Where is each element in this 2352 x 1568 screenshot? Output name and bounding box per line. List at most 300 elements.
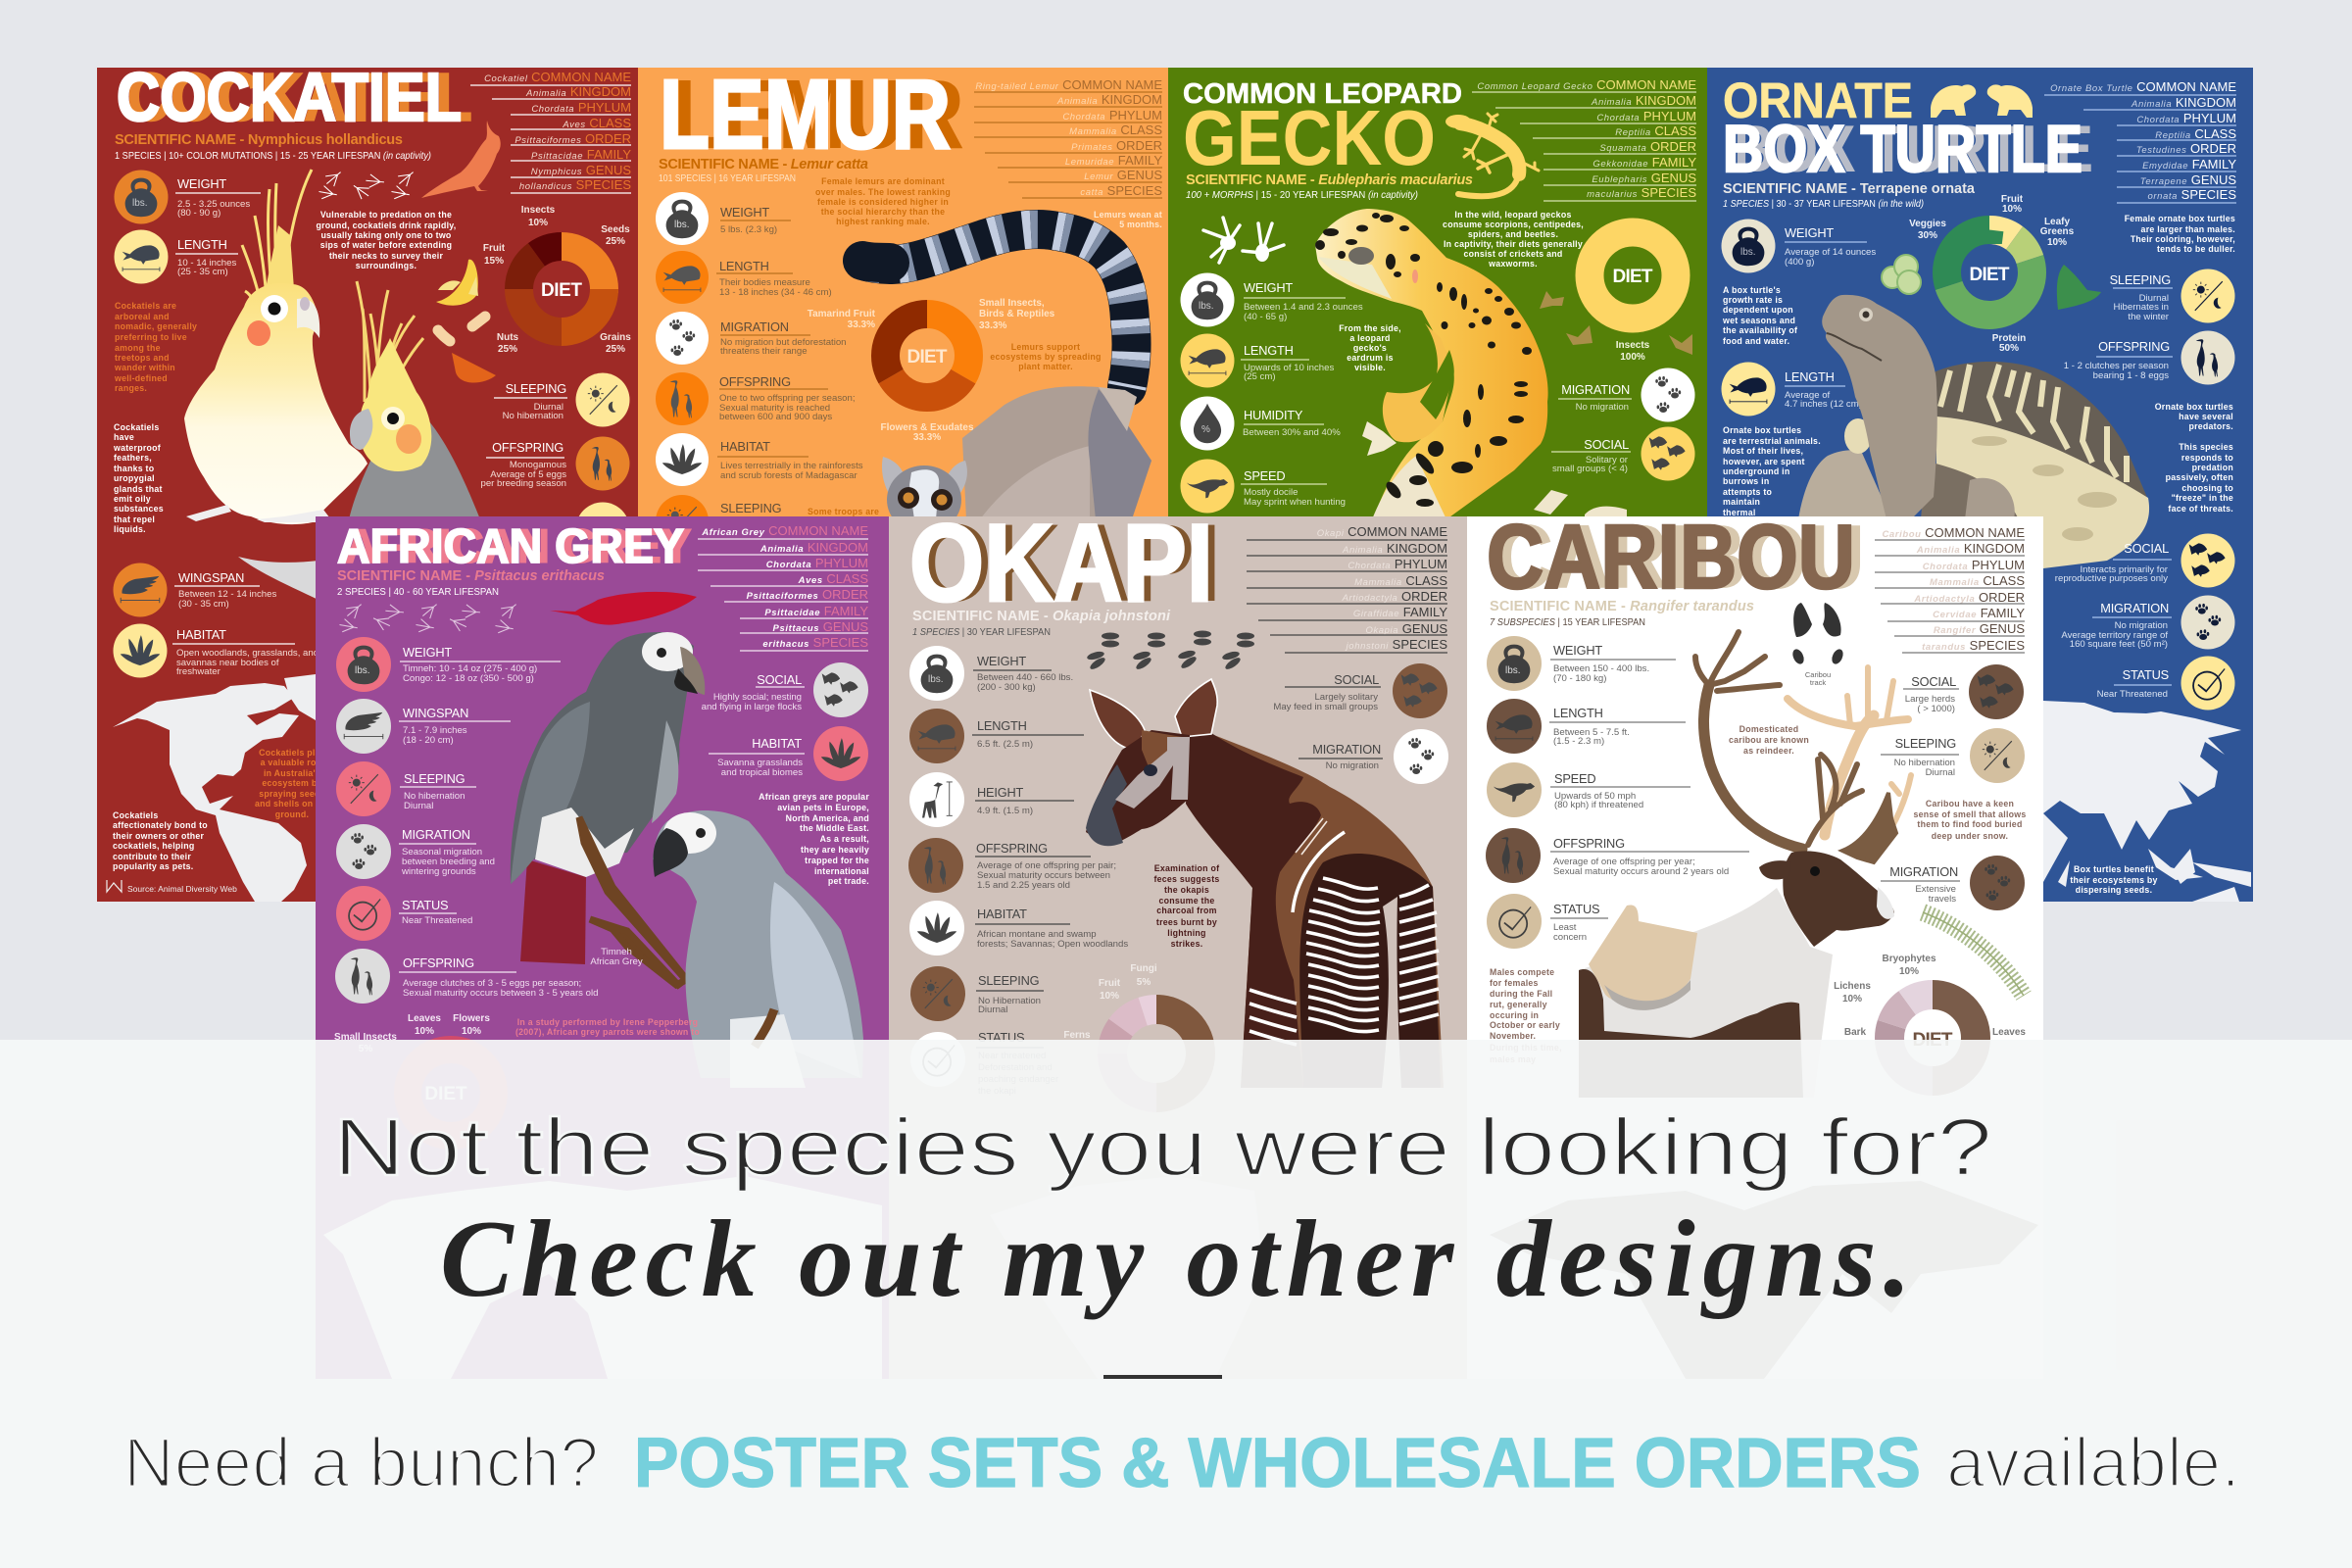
panel: leopard gecko poster [1168,68,1707,902]
note: charcoal: Examination of [1154,863,1219,873]
stat: length [114,229,238,284]
chart: diet donut: Veggies [1909,219,1946,229]
note: pet trade: pet trade. [828,876,869,886]
title: caribou: CARIBOU [1496,506,1865,608]
stat: sleeping [657,495,781,516]
stat: length: LENGTH [719,259,769,273]
stat: length: 4.7 inches (12 cm) [1785,399,1862,410]
stat: status [336,886,472,941]
note: charcoal: lightning [1167,928,1206,938]
stat: social: Solitary or [1586,455,1629,466]
stat: weight: lbs. [1199,301,1214,312]
taxonomy list: Animalia KINGDOM [760,540,868,555]
source credit: Source: Animal Diversity Web [127,884,237,894]
title: cockatiel: COCKATIEL [127,59,472,135]
chart: diet donut: 5% [1137,977,1151,988]
note: pet trade: they are heavily [801,845,869,855]
stat: sleeping: No hibernation [1894,758,1955,768]
stat: migration [1881,856,2025,910]
stat: speed: SPEED [1244,468,1285,483]
note: waterproof feathers: have [114,432,134,442]
stat: migration: threatens their range [720,346,808,357]
stat: humidity: HUMIDITY [1244,408,1303,422]
illustration: congo parrot [653,810,863,1088]
taxonomy list: Nymphicus GENUS [531,163,631,177]
note: charcoal: trees burnt by [1156,917,1217,927]
note: female dominance: female is considered higher in [817,197,949,207]
note: growth rate: the availability of [1723,325,1797,335]
chart: diet donut: Insects [521,205,556,216]
title: common leopard gecko: GECKO [1183,94,1436,181]
note: seeds ecosystem: and shells on the [255,799,329,808]
stat: status: STATUS [978,1030,1024,1045]
note: predators: This species [2179,442,2233,452]
illustration: caribou track: Caribou [1805,670,1831,679]
note: smell: deep under snow. [1932,831,2008,841]
note: waterproof feathers: emit oily [114,494,151,504]
note: waterproof feathers: glands that [114,484,163,494]
title: african grey: AFRICAN GREY [345,520,692,573]
note: charcoal: feces suggests [1153,874,1220,884]
species summary: 1 SPECIES | 10+ COLOR MUTATIONS | 15 - 25 YEAR LIFESPAN (in captivity) [115,150,431,162]
illustration: small cockatiel [349,281,480,519]
illustration: okapi [1086,679,1444,1088]
note: arboreal: wander within [114,363,175,372]
stat: weight: lbs. [928,674,944,685]
stat: sleeping [910,966,1044,1021]
stat: habitat: African montane and swamp [977,929,1097,940]
note: charcoal: strikes. [1171,939,1202,949]
taxonomy list: Emydidae FAMILY [2142,157,2236,172]
stat: social [702,662,868,717]
taxonomy list [698,523,868,651]
stat: offspring: One to two offspring per season; [719,393,855,404]
stat: migration: No migration [1326,760,1379,771]
title: ornate box turtle: BOX TURTLE [1723,112,2082,186]
taxonomy list [1472,77,1696,201]
taxonomy list: Lemuridae FAMILY [1065,153,1162,168]
illustration: tan antler [1788,667,1911,843]
stat: social: SOCIAL [1911,674,1956,689]
stat: sleeping: SLEEPING [2110,272,2171,287]
illustration: fern [1923,912,2024,996]
stat: offspring: Monogamous [510,460,566,470]
note: ecosystems: ecosystems by spreading [990,352,1102,362]
chart: diet donut [808,298,1055,443]
note: pets: their owners or other [113,831,205,841]
scientific name: SCIENTIFIC NAME - Psittacus erithacus [337,568,605,584]
note: terrestrial: thermal [1723,508,1756,517]
stat: social [2055,533,2234,588]
stat: status [1487,894,1608,949]
headline: check out my other designs: Check out my other designs. [440,1199,1911,1320]
title: common leopard gecko: COMMON LEOPARD [1183,78,1462,110]
stat: speed: (80 kph) if threatened [1554,800,1643,810]
stat: wingspan: Between 12 - 14 inches [178,589,276,600]
taxonomy list: Reptilia CLASS [1615,123,1696,138]
stat: weight: WEIGHT [177,176,226,191]
chart: diet donut: Tamarind Fruit [808,309,876,319]
taxonomy list: Psittacus GENUS [773,619,868,634]
stat: length [909,709,1084,763]
stat: length: Upwards of 10 inches [1244,363,1334,373]
note: fall rut: occuring in [1490,1010,1539,1020]
species summary: 100 + MORPHS | 15 - 20 YEAR LIFESPAN (in captivity) [1186,189,1418,201]
note: terrestrial: maintain [1723,497,1760,507]
stat: offspring: bearing 1 - 8 eggs [2093,370,2169,381]
note: females: Their coloring, however, [2131,234,2235,244]
note: terrestrial: however, are spent [1723,457,1805,466]
stat: weight: WEIGHT [977,654,1026,668]
note: charcoal: charcoal from [1156,906,1217,915]
note: arboreal: treetops and [115,353,170,363]
illustration: leafy greens [2057,265,2101,310]
note: fall rut: During this time, [1490,1043,1562,1053]
note: predators: face of threats. [2168,504,2233,514]
note: seeds ecosystem: in Australia's [264,768,320,778]
chart: diet donut: 100% [1620,352,1645,363]
stat: migration: MIGRATION [402,827,470,842]
taxonomy list: Rangifer GENUS [1934,621,2025,636]
chart: diet donut: Fruit [2001,194,2024,205]
stat: weight: Congo: 12 - 18 oz (350 - 500 g) [403,673,534,684]
stat: sleeping: SLEEPING [404,771,465,786]
stat: sleeping: No hibernation [503,411,564,421]
species summary: 1 SPECIES | 30 YEAR LIFESPAN [912,626,1051,638]
note: females: Female ornate box turtles [2125,214,2235,223]
stat: length [656,251,832,304]
chart: diet donut: Leaves [1992,1027,2026,1038]
stat: migration: MIGRATION [720,319,789,334]
stat: weight: WEIGHT [403,645,452,660]
note: wild diet: In the wild, leopard geckos [1454,210,1572,220]
illustration: bird tracks [338,599,520,635]
stat: height [909,772,1074,827]
stat: weight: lbs. [1505,665,1521,676]
note: arboreal: Cockatiels are [115,301,176,311]
taxonomy list: Eublepharis GENUS [1592,171,1696,185]
stat: length [1721,363,1862,416]
note: waterproof feathers: feathers, [114,453,152,463]
stat: wingspan: WINGSPAN [178,570,244,585]
stat: sleeping [494,372,629,427]
stat: length: LENGTH [1785,369,1835,384]
stat: offspring: 1.5 and 2.25 years old [977,880,1070,891]
note: pets: Cockatiels [113,810,159,820]
stat: offspring [481,437,629,490]
stat: social: SOCIAL [1334,672,1379,687]
stat: habitat [909,901,1128,956]
stat: length [1180,333,1334,388]
faded: world map [1490,1181,2038,1379]
chart: diet donut [1909,194,2075,354]
diet labels: 5% [359,1044,372,1054]
taxonomy list: Animalia KINGDOM [2131,95,2236,110]
chart: diet donut: DIET [1613,267,1653,287]
stat: weight: Timneh: 10 - 14 oz (275 - 400 g) [403,663,537,674]
taxonomy list [2044,79,2236,203]
title: lemur: LEMUR [660,60,951,170]
note: pet trade: avian pets in Europe, [777,803,869,812]
taxonomy list: Chordata PHYLUM [531,100,631,115]
stat: status: poaching endanger [978,1074,1059,1085]
note: seed dispersal: Box turtles benefit [2074,864,2154,874]
chart: diet donut: 10% [1842,994,1862,1004]
stat: weight: WEIGHT [1785,225,1834,240]
stat: wingspan: (30 - 35 cm) [178,599,229,610]
stat: sleeping: Diurnal [2139,293,2169,304]
chart: diet donut [1590,232,1676,363]
taxonomy list: Okapia GENUS [1365,621,1447,636]
chart: diet donut: 10% [1100,991,1119,1002]
illustration: gecko silhouette [1446,114,1539,196]
note: wild diet: In captivity, their diets generally [1444,239,1583,249]
note: reindeer: as reindeer. [1743,746,1794,756]
stat: weight [336,637,561,692]
taxonomy list [1247,524,1447,653]
chart: diet donut: DIET [907,347,948,368]
diet labels: 10% [462,1026,481,1037]
stat: social: SOCIAL [1584,437,1629,452]
title: ornate box turtle: ORNATE [1723,73,1913,128]
taxonomy list: johnstoni SPECIES [1345,637,1447,652]
chart: diet donut: Lichens [1834,981,1871,992]
chart: diet donut: Greens [2040,226,2075,237]
chart: diet donut: Nuts [497,332,519,343]
note: eardrum: eardrum is [1347,353,1394,363]
chart: diet donut: Fruit [1099,978,1121,989]
note: terrestrial: Ornate box turtles [1723,425,1801,435]
label: timneh: Timneh [601,947,632,957]
note: arboreal: ranges. [115,383,147,393]
note: eardrum: From the side, [1339,323,1401,333]
note: growth rate: wet seasons and [1722,316,1795,325]
chart: diet donut: 33.3% [913,432,941,443]
note: weaning: 5 months. [1119,220,1162,229]
note: terrestrial: underground in [1723,466,1789,476]
chart: diet donut: DIET [1913,1030,1953,1051]
stat: social [1903,664,2024,719]
note: drinking: ground, cockatiels drink rapidly, [316,220,457,230]
stat: length: LENGTH [977,718,1027,733]
note: females: tends to be duller. [2157,244,2235,254]
stat: status: STATUS [402,898,448,912]
stat: speed [1180,459,1346,514]
stat: sleeping: Hibernates in [2113,302,2169,313]
chart: diet donut: Fruit [483,243,506,254]
stat: social: and flying in large flocks [702,702,802,712]
stat: length: Average of [1785,390,1831,401]
stat: sleeping: Diurnal [1926,767,1955,778]
stat: migration: Seasonal migration [402,847,482,858]
note: eardrum: gecko's [1353,343,1387,353]
stat: migration [1558,368,1695,421]
note: waterproof feathers: Cockatiels [114,422,160,432]
taxonomy list: African Grey COMMON NAME [701,523,868,538]
taxonomy list: Artiodactyla ORDER [1913,590,2025,605]
note: waterproof feathers: uropygial [114,473,155,483]
note: pets: popularity as pets. [113,861,193,871]
title: caribou: CARIBOU [1487,506,1855,608]
faded: diet donut: DIET [424,1084,467,1104]
illustration: leopard gecko [1315,209,1627,519]
chart: diet donut [1834,954,2026,1081]
scientific name: SCIENTIFIC NAME - Nymphicus hollandicus [115,132,403,148]
footer line: wholesale: available. [1946,1425,2240,1502]
taxonomy list: Psittacidae FAMILY [531,147,631,162]
stat: migration [2061,596,2234,650]
note: waterproof feathers: waterproof [113,443,161,453]
faded: world map [323,1176,882,1379]
note: ecosystems: plant matter. [1018,362,1073,371]
stat: length: LENGTH [1244,343,1294,358]
taxonomy list [1875,525,2025,653]
note: predators: passively, often [2166,472,2233,482]
taxonomy list: Aves CLASS [798,571,868,586]
stat: habitat: HABITAT [176,627,226,642]
taxonomy list: Aves CLASS [562,116,631,130]
stat: weight: lbs. [1740,247,1756,258]
taxonomy list: Gekkonidae FAMILY [1592,155,1696,170]
taxonomy list: Mammalia CLASS [1069,122,1162,137]
stat: weight: (40 - 65 g) [1244,312,1287,322]
stat: weight: (400 g) [1785,257,1814,268]
note: growth rate: dependent upon [1723,305,1793,315]
stat: sleeping [2110,269,2234,323]
stat: migration: MIGRATION [1312,742,1381,757]
stat: habitat: HABITAT [977,906,1027,921]
diet labels: 10% [415,1026,434,1037]
taxonomy list: Psittacidae FAMILY [764,604,868,618]
icons: small turtles [1931,84,2033,118]
stat: migration: MIGRATION [1889,864,1958,879]
illustration: red feather [550,592,697,625]
chart: diet donut: 10% [528,218,548,228]
taxonomy list: Common Leopard Gecko COMMON NAME [1477,77,1696,92]
chart: diet donut: Leafy [2044,217,2070,227]
chart: diet donut: Birds & Reptiles [979,309,1055,319]
chart: diet donut [1063,963,1200,1098]
taxonomy list: Chordata PHYLUM [2136,111,2236,125]
illustration: cucumbers [1882,255,1921,294]
stat: status: STATUS [2123,667,2169,682]
stat: habitat: HABITAT [720,439,770,454]
note: growth rate: food and water. [1723,336,1789,346]
stat: migration: travels [1929,894,1956,905]
stat: social: ( > 1000) [1917,704,1955,714]
stat: length: 10 - 14 inches [177,258,236,269]
stat: weight: 2.5 - 3.25 ounces [177,199,250,210]
illustration: box turtle [1798,295,2149,568]
note: weaning: Lemurs wean at [1094,210,1162,220]
note: eardrum: a leopard [1349,333,1391,343]
stat: status [910,1030,1059,1097]
stat: wingspan: 7.1 - 7.9 inches [403,725,467,736]
stat: weight: (80 - 90 g) [177,208,220,219]
stat: offspring: Average of 5 eggs [490,469,566,480]
stat: social: Interacts primarily for [2080,564,2169,575]
stat: social: SOCIAL [757,672,802,687]
note: pet trade: trapped for the [805,856,869,865]
stat: offspring: OFFSPRING [1553,836,1625,851]
stat: height: 4.9 ft. (1.5 m) [977,806,1033,816]
taxonomy list: Mammalia CLASS [1930,573,2025,588]
note: wild diet: waxworms. [1488,259,1538,269]
illustration: bird tracks [318,172,414,200]
illustration: lemur head [882,457,967,534]
stat: weight: WEIGHT [1244,280,1293,295]
illustration: hoof tracks [1086,631,1254,671]
diet labels: Small Insects [334,1032,397,1043]
stat: habitat [656,433,863,486]
taxonomy list: Squamata ORDER [1599,139,1696,154]
title: cockatiel: COCKATIEL [117,59,462,135]
stat: length: LENGTH [1553,706,1603,720]
stat: length: 6.5 ft. (2.5 m) [977,739,1033,750]
stat: length: (25 - 35 cm) [177,267,228,277]
stat: offspring [1486,828,1749,883]
diet labels: Leaves [408,1013,441,1024]
stat: weight: lbs. [132,198,148,209]
note: ecosystems: Lemurs support [1011,342,1080,352]
chart: diet donut: 25% [498,344,517,355]
stat: sleeping: SLEEPING [506,381,566,396]
stat: habitat: and scrub forests of Madagascar [720,470,858,481]
chart: diet donut: 10% [1899,966,1919,977]
faded: world map [990,1176,1264,1379]
note: female dominance: the social hierarchy than the [821,207,945,217]
illustration: world map [2043,701,2251,902]
taxonomy list: Psittaciformes ORDER [747,587,868,602]
note: predators: have several [2179,412,2233,421]
note: female dominance: Female lemurs are dominant [821,176,945,186]
taxonomy list: ornata SPECIES [2147,187,2236,202]
note: pets: cockatiels, helping [113,841,194,851]
icon: social [578,502,627,516]
stat: sleeping: SLEEPING [720,501,781,515]
stat: weight [1721,220,1876,272]
note: arboreal: arboreal and [115,312,170,321]
taxonomy list: Ring-tailed Lemur COMMON NAME [975,77,1162,92]
stat: habitat [709,726,868,781]
note: growth rate: A box turtle's [1723,285,1781,295]
stat: habitat: Lives terrestrially in the rainforests [720,461,863,471]
stat: status [2097,657,2234,710]
scientific name: SCIENTIFIC NAME - Eublepharis macularius [1186,172,1473,188]
illustration: greenland [284,674,316,720]
title: lemur [663,78,962,151]
stat: migration: No migration but deforestation [720,337,847,348]
illustration: timneh parrot [511,632,705,964]
note: fall rut: rut, generally [1490,1000,1547,1009]
taxonomy list: Lemur GENUS [1084,168,1162,182]
note: pet trade: As a result, [820,834,869,844]
chart: diet donut: Flowers & Exudates [880,422,974,433]
note: pet trade: international [814,866,869,876]
note: wild diet: spiders, and beetles. [1468,229,1558,239]
chart: diet donut: Seeds [601,224,630,235]
stat: speed [1487,762,1690,817]
stat: status: Least [1553,922,1577,933]
taxonomy list: Chordata PHYLUM [1596,109,1696,123]
stat: status: concern [1553,932,1587,943]
taxonomy list: macularius SPECIES [1587,185,1696,200]
stat: habitat: forests; Savannas; Open woodlands [977,939,1128,950]
taxonomy list: Caribou COMMON NAME [1882,525,2025,540]
title: ornate box turtle: BOX TURTLE [1734,112,2093,186]
taxonomy list: Cervidae FAMILY [1933,606,2025,620]
headline: not the species: Not the species you were looking for? [333,1102,1992,1193]
